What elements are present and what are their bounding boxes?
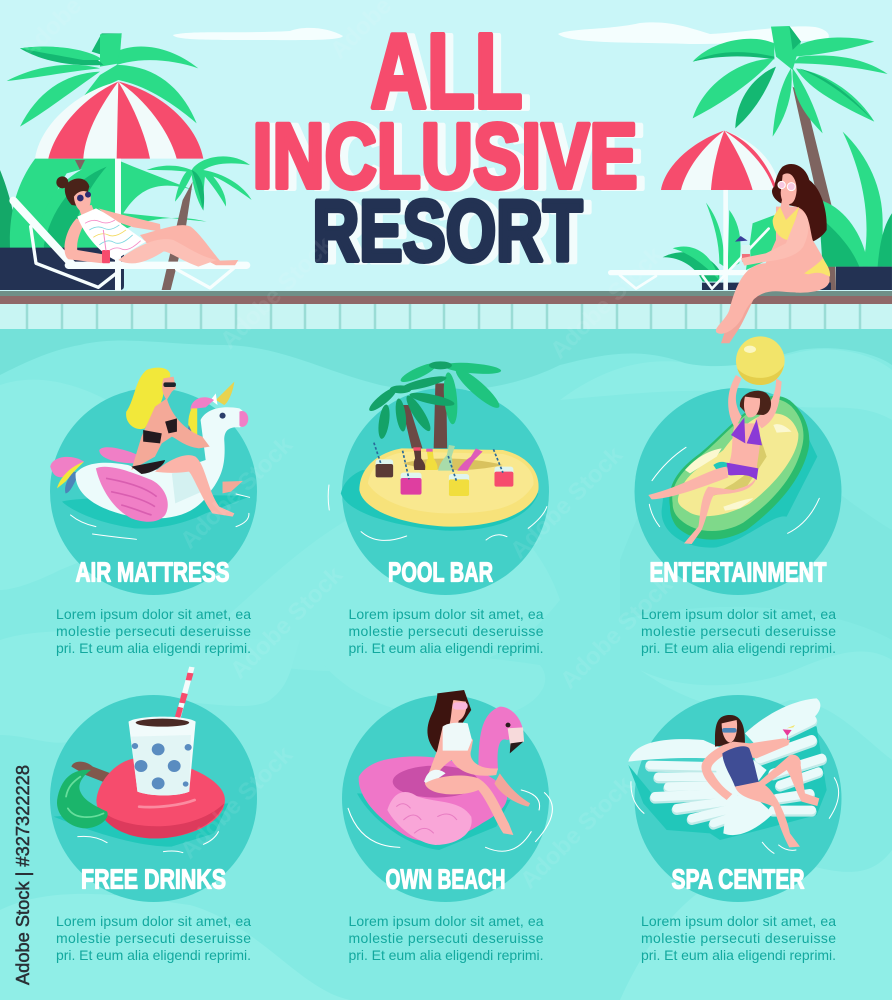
far leg: [721, 270, 766, 343]
watermark marks: Adobe Stock: [215, 231, 338, 354]
palm trunk left: [75, 160, 85, 170]
right bather figure: [716, 164, 830, 343]
label: ENTERTAINMENT: [650, 556, 827, 588]
sky background: [0, 0, 892, 292]
icon: unicorn float with woman: [50, 368, 250, 539]
sun lounger right: [611, 229, 769, 289]
sunglasses: [778, 181, 795, 191]
torso: [763, 207, 830, 293]
watermark marks: Adobe Stock: [505, 441, 628, 564]
stock credit: Adobe Stock | #327322228: [12, 765, 33, 985]
palm crown left: [7, 33, 198, 127]
pool water background: [0, 328, 892, 1000]
body text: Lorem ipsum dolor sit amet, ea: [348, 913, 544, 929]
circle: [634, 388, 842, 595]
watermark marks: Adobe Stock: [175, 431, 298, 554]
pool deck and tiles: [0, 291, 892, 329]
hair: [772, 164, 827, 242]
palm trunk right: [793, 87, 836, 290]
title line 3: RESORT: [312, 184, 582, 280]
body text: Lorem ipsum dolor sit amet, ea: [56, 913, 251, 929]
title: [252, 12, 646, 281]
icon: angel wing float with woman: [628, 698, 839, 853]
circle: [50, 388, 257, 595]
watermark marks: Adobe Stock: [555, 571, 678, 694]
title line 2: INCLUSIVE: [252, 106, 638, 208]
body text: Lorem ipsum dolor sit amet, ea: [641, 606, 836, 622]
icon: island bar: [328, 360, 547, 540]
body text: pri. Et eum alia eligendi reprimi.: [348, 640, 544, 656]
icon: flamingo float with woman: [348, 690, 552, 851]
panel: air mattress: [50, 368, 257, 656]
body text: pri. Et eum alia eligendi reprimi.: [641, 947, 836, 963]
label: POOL BAR: [388, 556, 493, 588]
sun lounger: [13, 201, 247, 288]
body text: Lorem ipsum dolor sit amet, ea: [641, 913, 836, 929]
panel: entertainment: [634, 336, 842, 656]
body text: pri. Et eum alia eligendi reprimi.: [56, 640, 251, 656]
body text: molestie persecuti deseruisse: [56, 623, 251, 639]
umbrella: [35, 82, 203, 291]
panel: spa center: [628, 695, 842, 963]
dark leaf shadow: [43, 167, 107, 248]
cocktail: [735, 236, 750, 262]
label: FREE DRINKS: [81, 864, 226, 894]
icon: cup in apple float: [54, 667, 228, 853]
woman lying on lounger: [56, 176, 238, 267]
title shadow: RESORT: [320, 185, 590, 281]
plant leaves right: [819, 132, 892, 267]
watermark marks: Adobe Stock: [515, 771, 638, 894]
panel: pool bar: [328, 360, 549, 656]
umbrella right: [661, 131, 780, 290]
circle: [634, 695, 842, 902]
body text: pri. Et eum alia eligendi reprimi.: [56, 947, 251, 963]
big feathers and tail: [628, 698, 820, 835]
water shadow: [628, 723, 827, 840]
body text: pri. Et eum alia eligendi reprimi.: [348, 947, 544, 963]
label: OWN BEACH: [386, 864, 506, 894]
palm crown right: [693, 26, 888, 137]
arm: [741, 210, 809, 266]
bottles: [413, 445, 483, 471]
watermark marks: Adobe Stock: [175, 741, 298, 864]
label: AIR MATTRESS: [76, 556, 230, 588]
face: [779, 173, 797, 213]
panel: free drinks: [50, 667, 257, 963]
body text: molestie persecuti deseruisse: [641, 623, 836, 639]
panel: own beach: [342, 690, 552, 963]
scene: left sunbather: [0, 33, 252, 291]
circle: [342, 695, 549, 902]
body text: pri. Et eum alia eligendi reprimi.: [641, 640, 836, 656]
watermark marks: [15, 0, 678, 894]
navy planter: [0, 248, 124, 290]
title shadow: INCLUSIVE: [260, 106, 646, 208]
watermark marks: Adobe Stock: [225, 561, 348, 684]
bikini: [773, 207, 830, 277]
title shadow: ALL: [378, 14, 530, 132]
dark plant leaf: [0, 170, 18, 248]
jars: [374, 443, 513, 496]
woman: [702, 715, 819, 847]
circle: [50, 695, 257, 902]
watermark marks: Adobe Stock: [545, 241, 668, 364]
body text: molestie persecuti deseruisse: [348, 930, 544, 946]
title shadow: [260, 14, 646, 281]
title line 1: ALL: [370, 12, 522, 130]
body text: Lorem ipsum dolor sit amet, ea: [348, 606, 544, 622]
body text: Lorem ipsum dolor sit amet, ea: [56, 606, 251, 622]
body text: molestie persecuti deseruisse: [56, 930, 251, 946]
cloud left: [173, 28, 343, 40]
plant behind umbrella: [663, 203, 783, 282]
body text: molestie persecuti deseruisse: [641, 930, 836, 946]
small palm: [147, 156, 252, 290]
feathers: [650, 720, 822, 825]
cloud right: [558, 22, 829, 44]
navy planters right: [702, 267, 892, 290]
circle: [342, 388, 549, 595]
scene: right bather at pool edge: [611, 26, 892, 290]
big plant leaves: [10, 123, 207, 248]
body text: molestie persecuti deseruisse: [348, 623, 544, 639]
label: SPA CENTER: [672, 864, 805, 894]
near leg: [716, 263, 829, 334]
icon: avocado float with woman and ball: [648, 336, 819, 548]
